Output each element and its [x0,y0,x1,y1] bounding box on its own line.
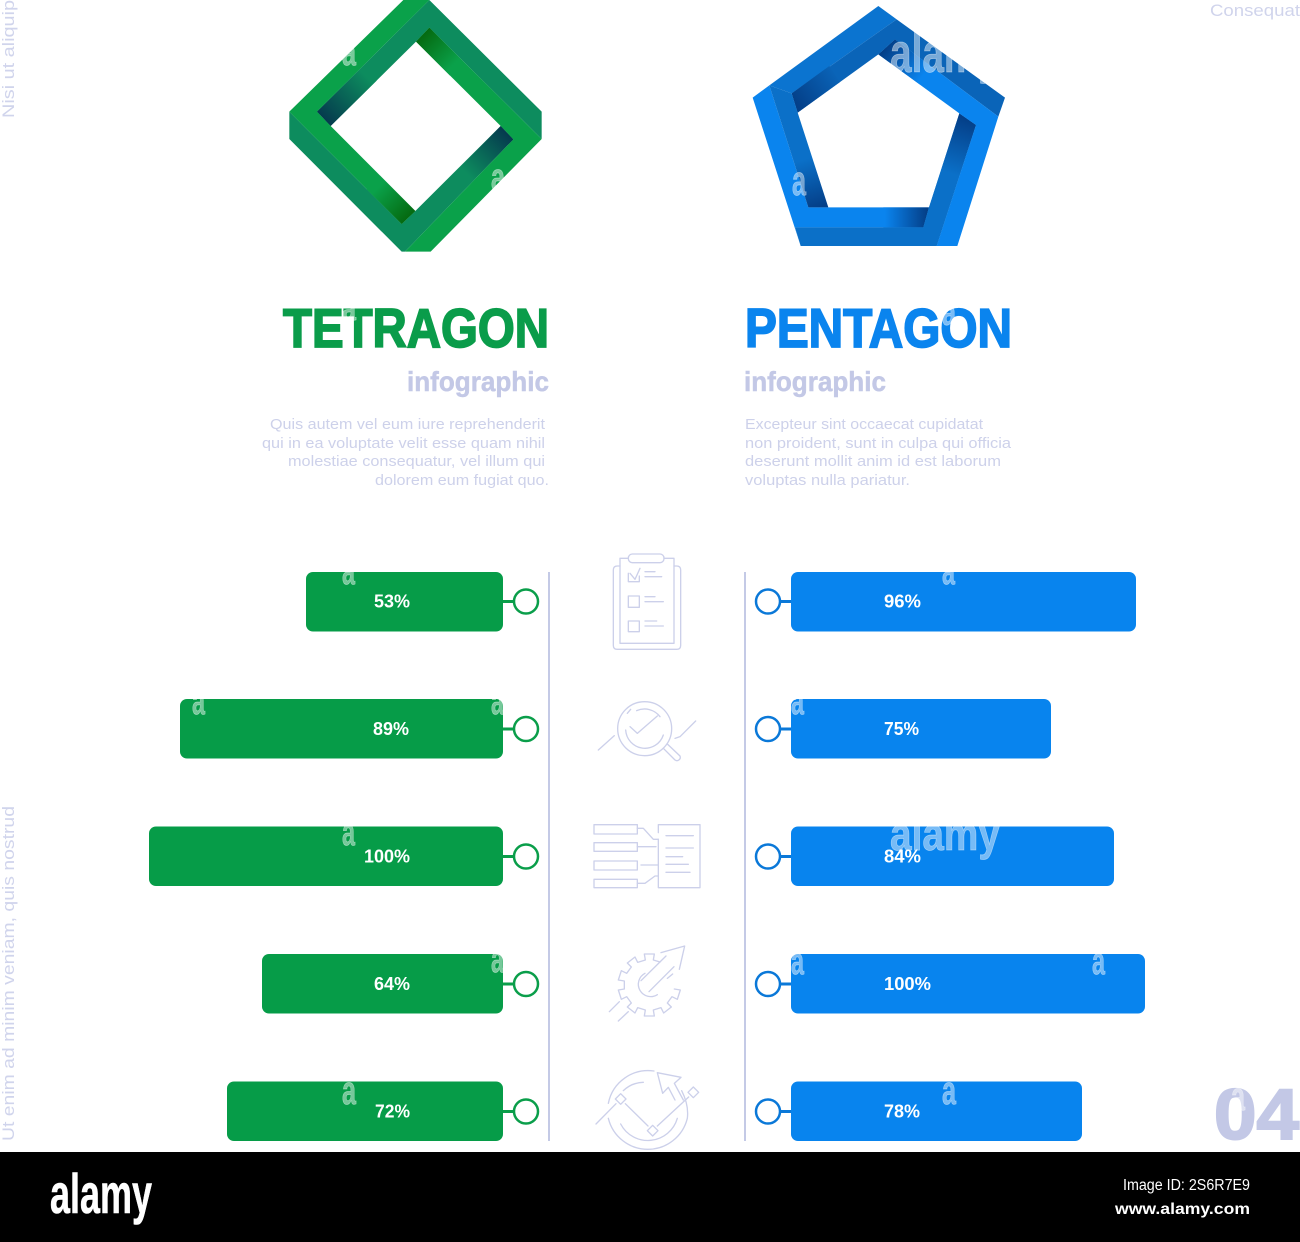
watermark letters: a [342,812,356,854]
bar: pentagon 96% [756,572,1136,632]
bar: pentagon 75%: 75% [884,719,919,739]
bar: tetragon 100% [149,826,538,886]
watermark letters: a [791,941,805,983]
side text: top right: Consequat [1210,1,1300,20]
watermark letters: a [491,939,505,981]
watermark letters: a [791,681,805,723]
text block: pentagon description: voluptas nulla pariatur. [745,472,910,489]
watermark letters: a [942,1069,956,1113]
watermark letters: a [342,1069,356,1113]
watermark letters: a [342,32,357,74]
watermark letters: a [342,291,356,327]
bar: pentagon 96%: 96% [884,592,921,612]
bar chart: tetragon [149,572,538,1141]
bar: tetragon 100%: 100% [364,846,410,866]
text block: tetragon description: dolorem eum fugiat quo. [375,472,549,489]
watermark letters: a [1092,941,1106,983]
bar: tetragon 89%: 89% [373,719,409,739]
watermark letters: a [942,551,956,593]
bar chart: pentagon [756,572,1145,1141]
bar: tetragon 72%: 72% [375,1102,410,1122]
icon: growth chart with circular arrow [596,1071,699,1149]
icon: list to document [594,825,700,888]
heading: TETRAGON: TETRAGON [283,297,549,359]
text block: pentagon description: deserunt mollit anim id est laborum [745,453,1001,470]
watermark letters: a [1231,1075,1245,1119]
text block: pentagon description: Excepteur sint occaecat cupidatat [745,416,984,433]
page number: 04 [1214,1076,1300,1155]
icon: impossible pentagon [753,6,1005,246]
subheading: right infographic: infographic [744,366,886,397]
bar: tetragon 64% [262,954,538,1014]
bar: tetragon 89% [180,699,538,758]
watermark letters: a [342,551,356,593]
footer bar: alamy [50,1162,152,1225]
bar: tetragon 72% [227,1082,538,1141]
text block: tetragon description: molestiae consequatur, vel illum qui [288,453,545,470]
footer bar: Image ID: 2S6R7E9 [1123,1177,1250,1194]
watermark letters: a [192,681,206,723]
text block: pentagon description [745,416,1012,489]
text block: tetragon description: qui in ea voluptate velit esse quam nihil [262,435,545,452]
bar: pentagon 84%: 84% [884,846,921,866]
bar: pentagon 100%: 100% [884,974,931,994]
watermark letters: a [491,157,506,199]
bar: tetragon 53%: 53% [374,592,410,612]
bar: pentagon 100% [756,954,1145,1014]
text block: pentagon description: non proident, sunt in culpa qui officia [745,435,1012,452]
footer bar [0,1152,1300,1242]
watermark letters: alamy [890,808,1000,860]
bar: pentagon 78%: 78% [884,1102,920,1122]
axis line: right [744,572,746,1141]
watermark letters: a [491,681,505,723]
bar: tetragon 53% [306,572,538,632]
axis line: left [548,572,550,1141]
subheading: left infographic: infographic [407,366,549,397]
footer bar: www.alamy.com [1114,1201,1250,1218]
heading: PENTAGON: PENTAGON [745,297,1012,359]
icon: magnifier with check [598,702,696,761]
icon: gear with arrow [609,946,685,1021]
text block: tetragon description [262,416,549,489]
bar: tetragon 64%: 64% [374,974,410,994]
watermark letters: a [792,157,806,204]
bar: pentagon 84% [756,826,1114,886]
icon: clipboard checklist [613,554,681,649]
watermark letters: a [942,292,957,333]
text block: tetragon description: Quis autem vel eum iure reprehenderit [270,416,546,433]
watermark letters: alamy [890,21,1000,84]
icon: impossible tetragon [289,0,542,252]
watermark letters [192,21,1245,1119]
bar: pentagon 75% [756,699,1051,758]
bar: pentagon 78% [756,1082,1082,1141]
